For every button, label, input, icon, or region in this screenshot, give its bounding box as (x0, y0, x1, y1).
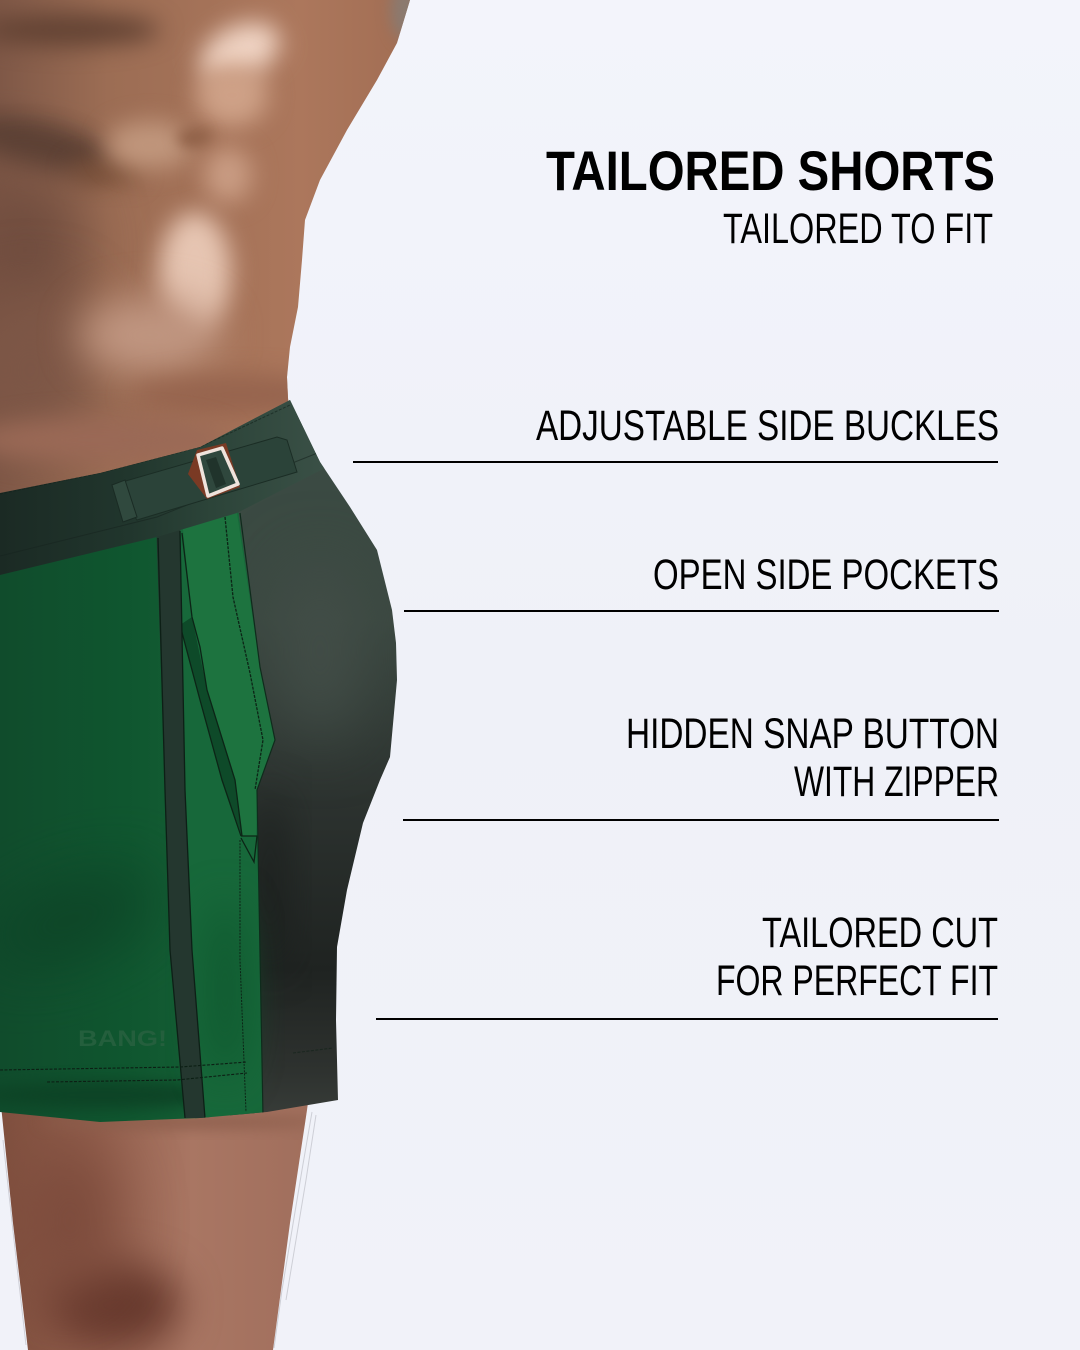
waistband (0, 395, 325, 575)
torso (0, 0, 430, 520)
pocket flap (182, 500, 275, 836)
pocket stitching (180, 517, 263, 1112)
feature: hidden snap button with zipper: WITH ZIPPER (794, 758, 999, 806)
heading: TAILORED SHORTS (546, 139, 995, 202)
shorts: side green panel (180, 512, 263, 1118)
side panel seam (240, 513, 275, 1116)
feature: tailored cut for perfect fit (376, 909, 998, 1020)
photo: model wearing green shorts (0, 0, 430, 1350)
waistband strap (112, 437, 297, 520)
subheading: TAILORED TO FIT (723, 205, 993, 253)
thigh (0, 1090, 320, 1350)
title block (546, 139, 995, 253)
shorts (0, 395, 410, 1130)
strap and buckle (112, 437, 297, 522)
feature: hidden snap button with zipper (403, 710, 999, 821)
icon: side buckle (188, 443, 240, 499)
belt loop (112, 480, 137, 522)
shorts: dark side panel (230, 400, 410, 1130)
hem stitching (0, 1048, 333, 1082)
pocket opening (180, 617, 242, 836)
feature: tailored cut for perfect fit: TAILORED CUT (762, 909, 998, 957)
shorts: main green panel (0, 510, 210, 1125)
logo on shorts: BANG! (78, 1026, 167, 1051)
leg hair fringe (3, 1112, 316, 1348)
zipper stripe (156, 515, 205, 1118)
